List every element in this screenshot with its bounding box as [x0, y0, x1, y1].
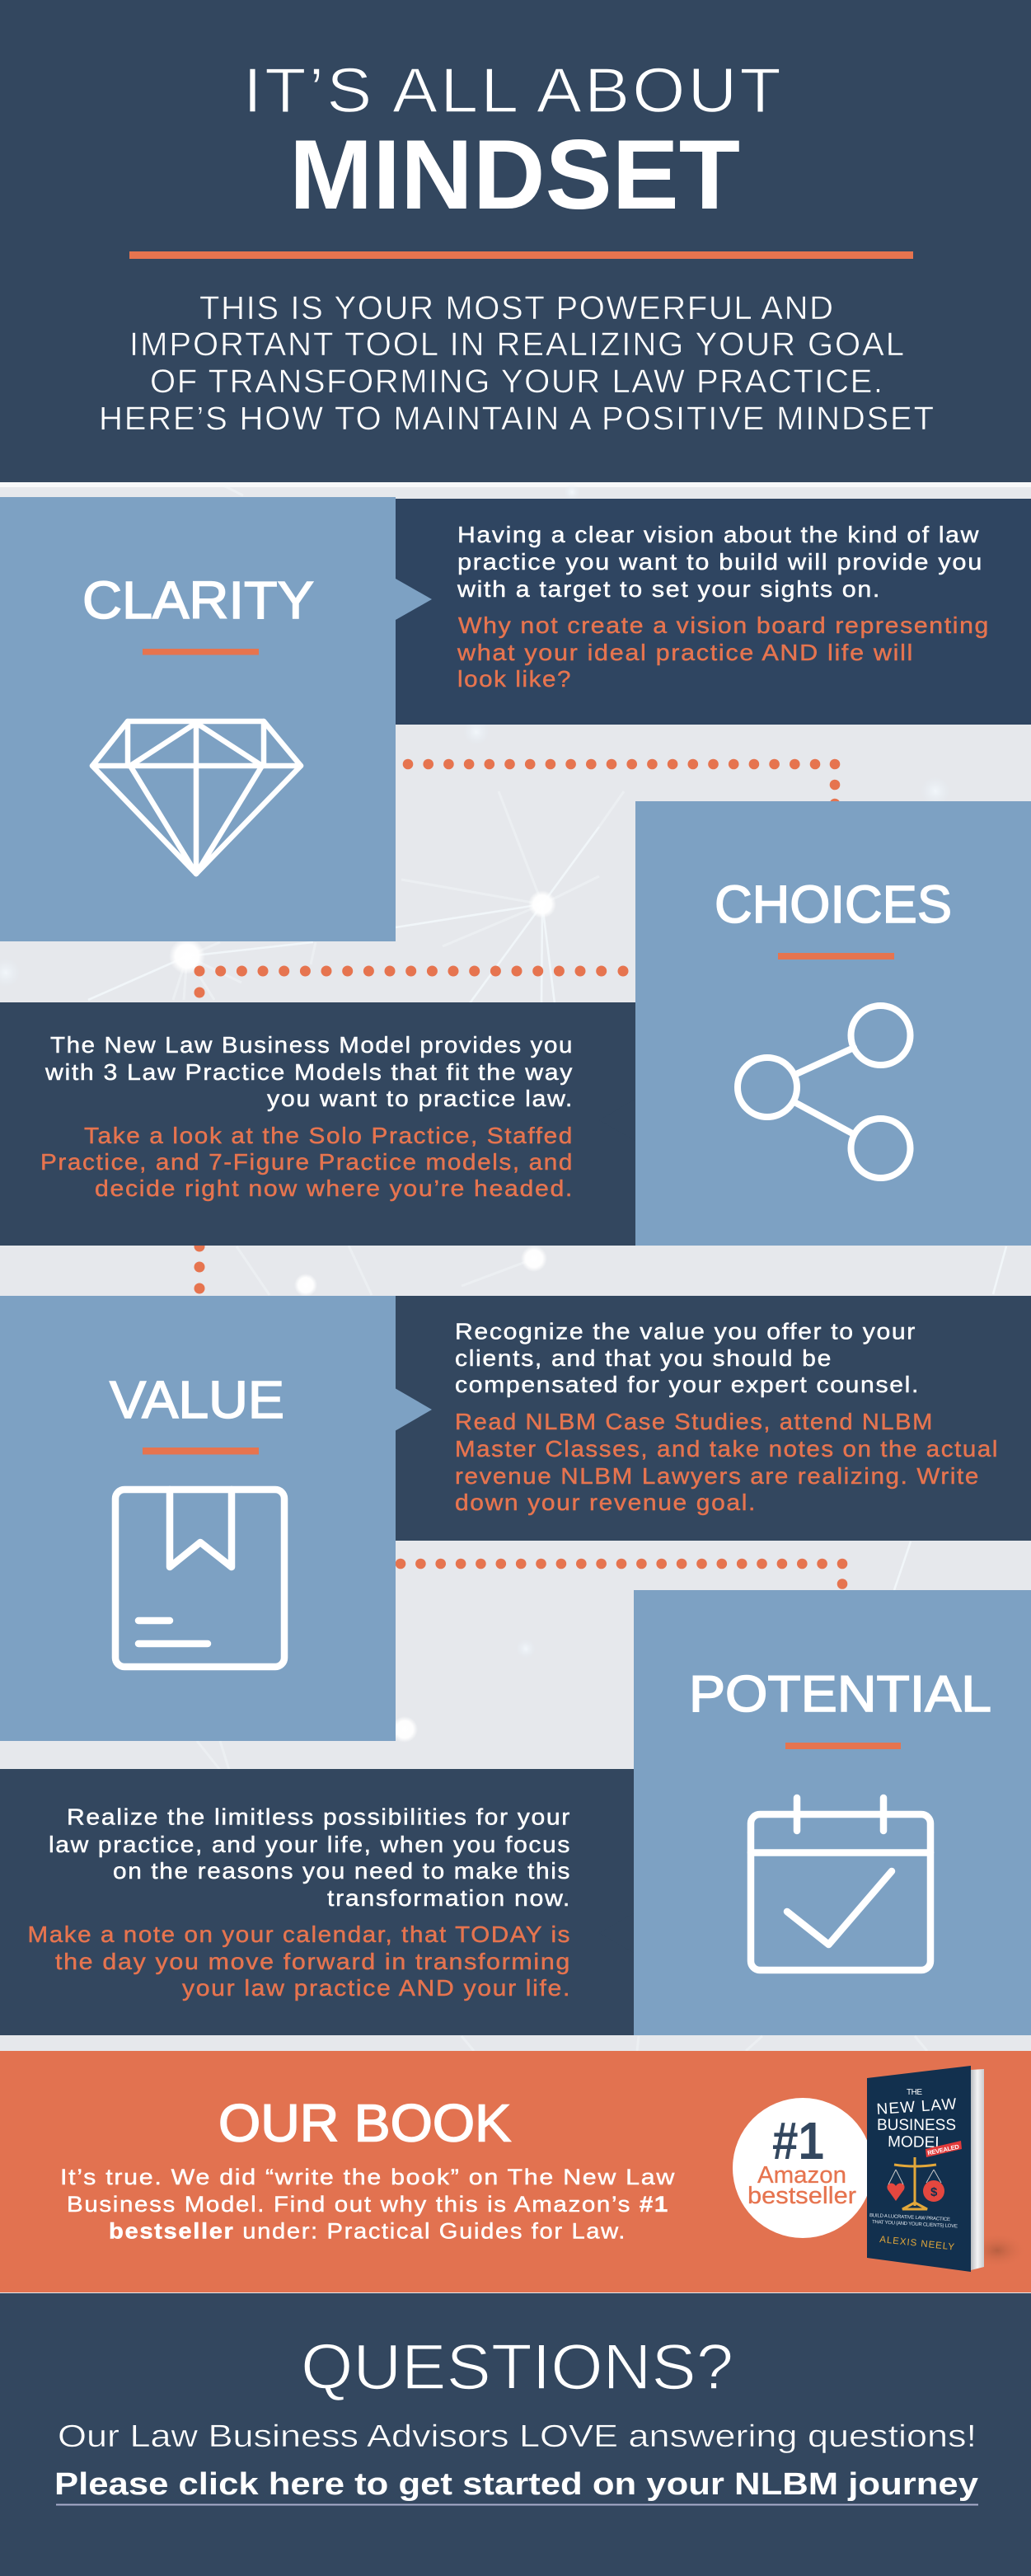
value body text [455, 1319, 920, 1397]
potential text panel [0, 1769, 634, 2035]
clarity body text: Having a clear vision about the kind of law [457, 522, 980, 547]
potential body text: transformation now. [327, 1885, 571, 1911]
book cover: $ [930, 2185, 938, 2199]
value action text: Master Classes, and take notes on the actual [455, 1436, 999, 1462]
potential rule [785, 1743, 901, 1749]
questions text: Our Law Business Advisors LOVE answering questions! [58, 2419, 977, 2454]
panel: potential [0, 1590, 1031, 2035]
book cover: REVEALED [927, 2142, 960, 2156]
value body text: Recognize the value you offer to your [455, 1319, 916, 1344]
our book text [60, 2165, 676, 2244]
connector dots: value to potential [396, 1559, 847, 1589]
book cover: BUSINESS [877, 2117, 956, 2134]
value body text: compensated for your expert counsel. [455, 1372, 920, 1397]
value rule [143, 1448, 259, 1454]
value body text: clients, and that you should be [455, 1345, 832, 1371]
panel: questions footer [0, 2293, 1031, 2576]
title: its all about: IT’S ALL ABOUT [243, 55, 784, 126]
clarity body text: practice you want to build will provide you [457, 549, 983, 575]
value action text: revenue NLBM Lawyers are realizing. Write [455, 1463, 980, 1489]
choices body text [45, 1032, 574, 1111]
clarity body text: with a target to set your sights on. [457, 576, 881, 602]
questions heading: QUESTIONS? [301, 2330, 733, 2403]
potential heading: POTENTIAL [689, 1666, 991, 1723]
choices body text: The New Law Business Model provides you [50, 1032, 574, 1058]
badge: #1 amazon bestseller: bestseller [747, 2183, 856, 2209]
potential action text: Make a note on your calendar, that TODAY is [28, 1921, 571, 1947]
clarity heading: CLARITY [82, 570, 314, 630]
choices heading: CHOICES [715, 875, 952, 934]
choices action text: Take a look at the Solo Practice, Staffed [84, 1123, 574, 1148]
header panel [0, 0, 1031, 482]
connector dots: choices to value [194, 966, 628, 1294]
icon: diamond [92, 721, 301, 874]
arrow: potential [599, 1913, 634, 1953]
choices action text: decide right now where you’re headed. [95, 1175, 574, 1201]
book cover [867, 2066, 1027, 2272]
panel: value [0, 1296, 1031, 1741]
book cover: ALEXIS NEELY [879, 2235, 955, 2253]
value heading: VALUE [110, 1370, 284, 1429]
potential body text: Realize the limitless possibilities for your [67, 1804, 571, 1830]
potential body text [49, 1804, 571, 1911]
clarity rule [143, 649, 259, 655]
book cover: THAT YOU (AND YOUR CLIENTS) LOVE [872, 2220, 958, 2229]
choices action text: Practice, and 7-Figure Practice models, and [40, 1149, 574, 1175]
book cover: THE [907, 2088, 922, 2097]
clarity action text: look like? [457, 666, 572, 692]
badge: #1 amazon bestseller: Amazon [757, 2162, 846, 2189]
potential action text [28, 1921, 571, 2001]
value action text [455, 1409, 999, 1515]
book cover: BUILD A LUCRATIVE LAW PRACTICE [869, 2213, 950, 2222]
choices body text: with 3 Law Practice Models that fit the way [45, 1059, 574, 1085]
icon: share nodes [738, 1006, 910, 1178]
choices rule [778, 953, 894, 960]
value text panel [396, 1296, 1031, 1541]
intro text: OF TRANSFORMING YOUR LAW PRACTICE. [150, 364, 883, 400]
arrow: clarity [396, 579, 432, 620]
intro text: IMPORTANT TOOL IN REALIZING YOUR GOAL [129, 326, 904, 363]
panel: our book [0, 2051, 1031, 2292]
clarity action text: Why not create a vision board representing [458, 612, 990, 638]
choices text panel [0, 1002, 635, 1246]
panel: choices [0, 801, 1031, 1246]
connector dots: clarity to choices [403, 759, 840, 809]
background network pattern [0, 482, 1031, 2053]
potential action text: the day you move forward in transforming [55, 1949, 571, 1974]
clarity action text: what your ideal practice AND life will [457, 640, 914, 665]
badge: #1 amazon bestseller [733, 2098, 873, 2238]
potential body text: on the reasons you need to make this [113, 1858, 571, 1884]
icon: book box [115, 1490, 284, 1667]
title: mindset: MINDSET [289, 120, 740, 230]
clarity text panel [396, 499, 1031, 725]
arrow: value [396, 1388, 432, 1431]
our book text: bestseller under: Practical Guides for Law. [109, 2219, 626, 2244]
potential body text: law practice, and your life, when you focus [49, 1832, 571, 1857]
book cover: MODEL [888, 2133, 944, 2151]
book cover: NEW LAW [876, 2095, 957, 2119]
call to action link: Please click here to get started on your NLBM journey [54, 2467, 978, 2502]
intro text: THIS IS YOUR MOST POWERFUL AND [199, 290, 833, 326]
arrow: choices [599, 1099, 635, 1141]
icon: calendar check [751, 1798, 930, 1970]
value action text: Read NLBM Case Studies, attend NLBM [455, 1409, 934, 1434]
clarity action text [457, 612, 990, 692]
panel: clarity [0, 497, 1031, 941]
choices action text [40, 1123, 574, 1201]
title rule [129, 251, 913, 259]
intro text: HERE’S HOW TO MAINTAIN A POSITIVE MINDSET [99, 401, 934, 437]
our book text: Business Model. Find out why this is Amazon’s #1 [67, 2192, 669, 2217]
badge: #1 amazon bestseller: #1 [772, 2111, 824, 2170]
our book heading: OUR BOOK [218, 2093, 511, 2152]
intro text [99, 290, 934, 437]
potential action text: your law practice AND your life. [182, 1975, 571, 2001]
clarity body text [457, 522, 983, 602]
our book text: It’s true. We did “write the book” on The New Law [60, 2165, 676, 2189]
choices body text: you want to practice law. [267, 1086, 574, 1111]
value action text: down your revenue goal. [455, 1490, 757, 1515]
